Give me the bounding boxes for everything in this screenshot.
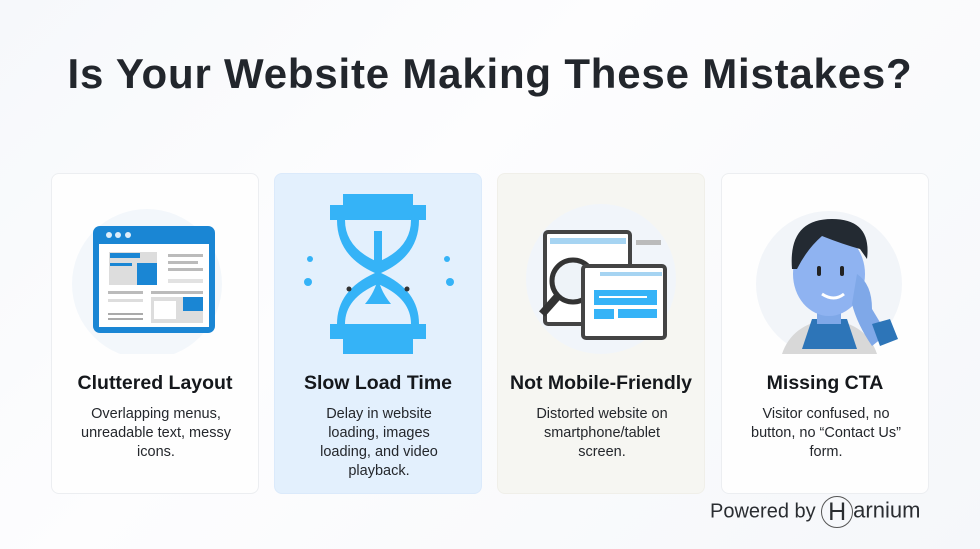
title: Is Your Website Making These Mistakes?: [68, 50, 912, 97]
description: Delay in website loading, images loading, and video playback.: [320, 406, 438, 479]
icon: confused visitor: [756, 211, 902, 354]
icon: browsers with magnifier: [539, 230, 667, 340]
panel: slow load time: [274, 173, 482, 494]
description: Overlapping menus, unreadable text, messy icons.: [81, 406, 231, 460]
footer: powered by logo: Powered by arnium: [710, 497, 920, 522]
panel: cluttered layout: [51, 173, 259, 494]
icon: cluttered browser: [72, 209, 222, 354]
card title: Not Mobile-Friendly: [510, 372, 692, 394]
card title: Slow Load Time: [304, 372, 452, 394]
footer: powered by logo: H: [828, 498, 846, 526]
icon: hourglass: [304, 194, 454, 354]
panel: not mobile-friendly: [497, 173, 705, 494]
panel: missing CTA: [721, 173, 929, 494]
description: Distorted website on smartphone/tablet screen.: [536, 406, 668, 460]
card title: Missing CTA: [767, 372, 883, 394]
description: Visitor confused, no button, no “Contact Us” form.: [751, 406, 901, 460]
card title: Cluttered Layout: [78, 372, 232, 394]
